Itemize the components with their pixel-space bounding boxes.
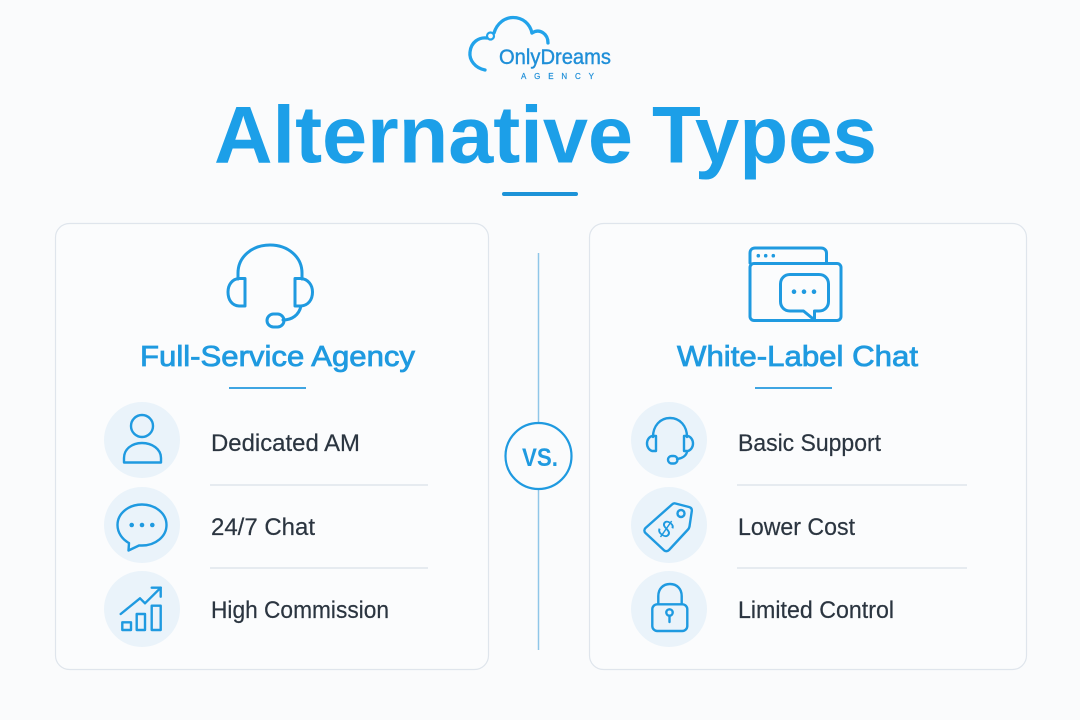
heading underline	[755, 387, 832, 389]
label: Lower Cost	[738, 514, 855, 541]
icon: person	[124, 415, 161, 462]
title	[214, 90, 877, 180]
icon: cloud	[470, 18, 548, 70]
icon: headset	[228, 245, 312, 327]
icon: price tag: $	[652, 515, 679, 544]
row: Lower Cost	[631, 487, 855, 563]
icon: chat bubble	[118, 504, 166, 550]
vs label: VS.	[522, 444, 558, 472]
label: Dedicated AM	[211, 430, 360, 457]
title underline	[502, 192, 578, 196]
logo: OnlyDreams Agency	[470, 18, 611, 81]
row: High Commission	[104, 571, 389, 647]
logo wordmark: OnlyDreams	[499, 46, 611, 69]
label: High Commission	[211, 597, 389, 624]
heading underline	[229, 387, 306, 389]
title: Types	[652, 90, 877, 180]
heading: Full-Service Agency	[140, 341, 416, 373]
icon: small headset	[647, 418, 693, 464]
panel: Full-Service Agency	[56, 224, 488, 670]
row: 24/7 Chat	[104, 487, 315, 563]
icon: growth chart	[121, 588, 161, 630]
panel: White-Label Chat	[590, 224, 1026, 670]
heading: White-Label Chat	[677, 341, 918, 373]
vs divider	[506, 253, 572, 650]
row: Limited Control	[631, 571, 894, 647]
title: Alternative	[214, 90, 633, 180]
logo tagline: AGENCY	[521, 72, 595, 81]
label: Basic Support	[738, 430, 881, 457]
row: Basic Support	[631, 402, 881, 478]
icon: price tag	[644, 503, 692, 551]
icon: browser with chat	[750, 248, 841, 320]
label: 24/7 Chat	[211, 514, 315, 541]
icon: padlock	[652, 584, 687, 631]
label: Limited Control	[738, 597, 894, 624]
row: Dedicated AM	[104, 402, 360, 478]
